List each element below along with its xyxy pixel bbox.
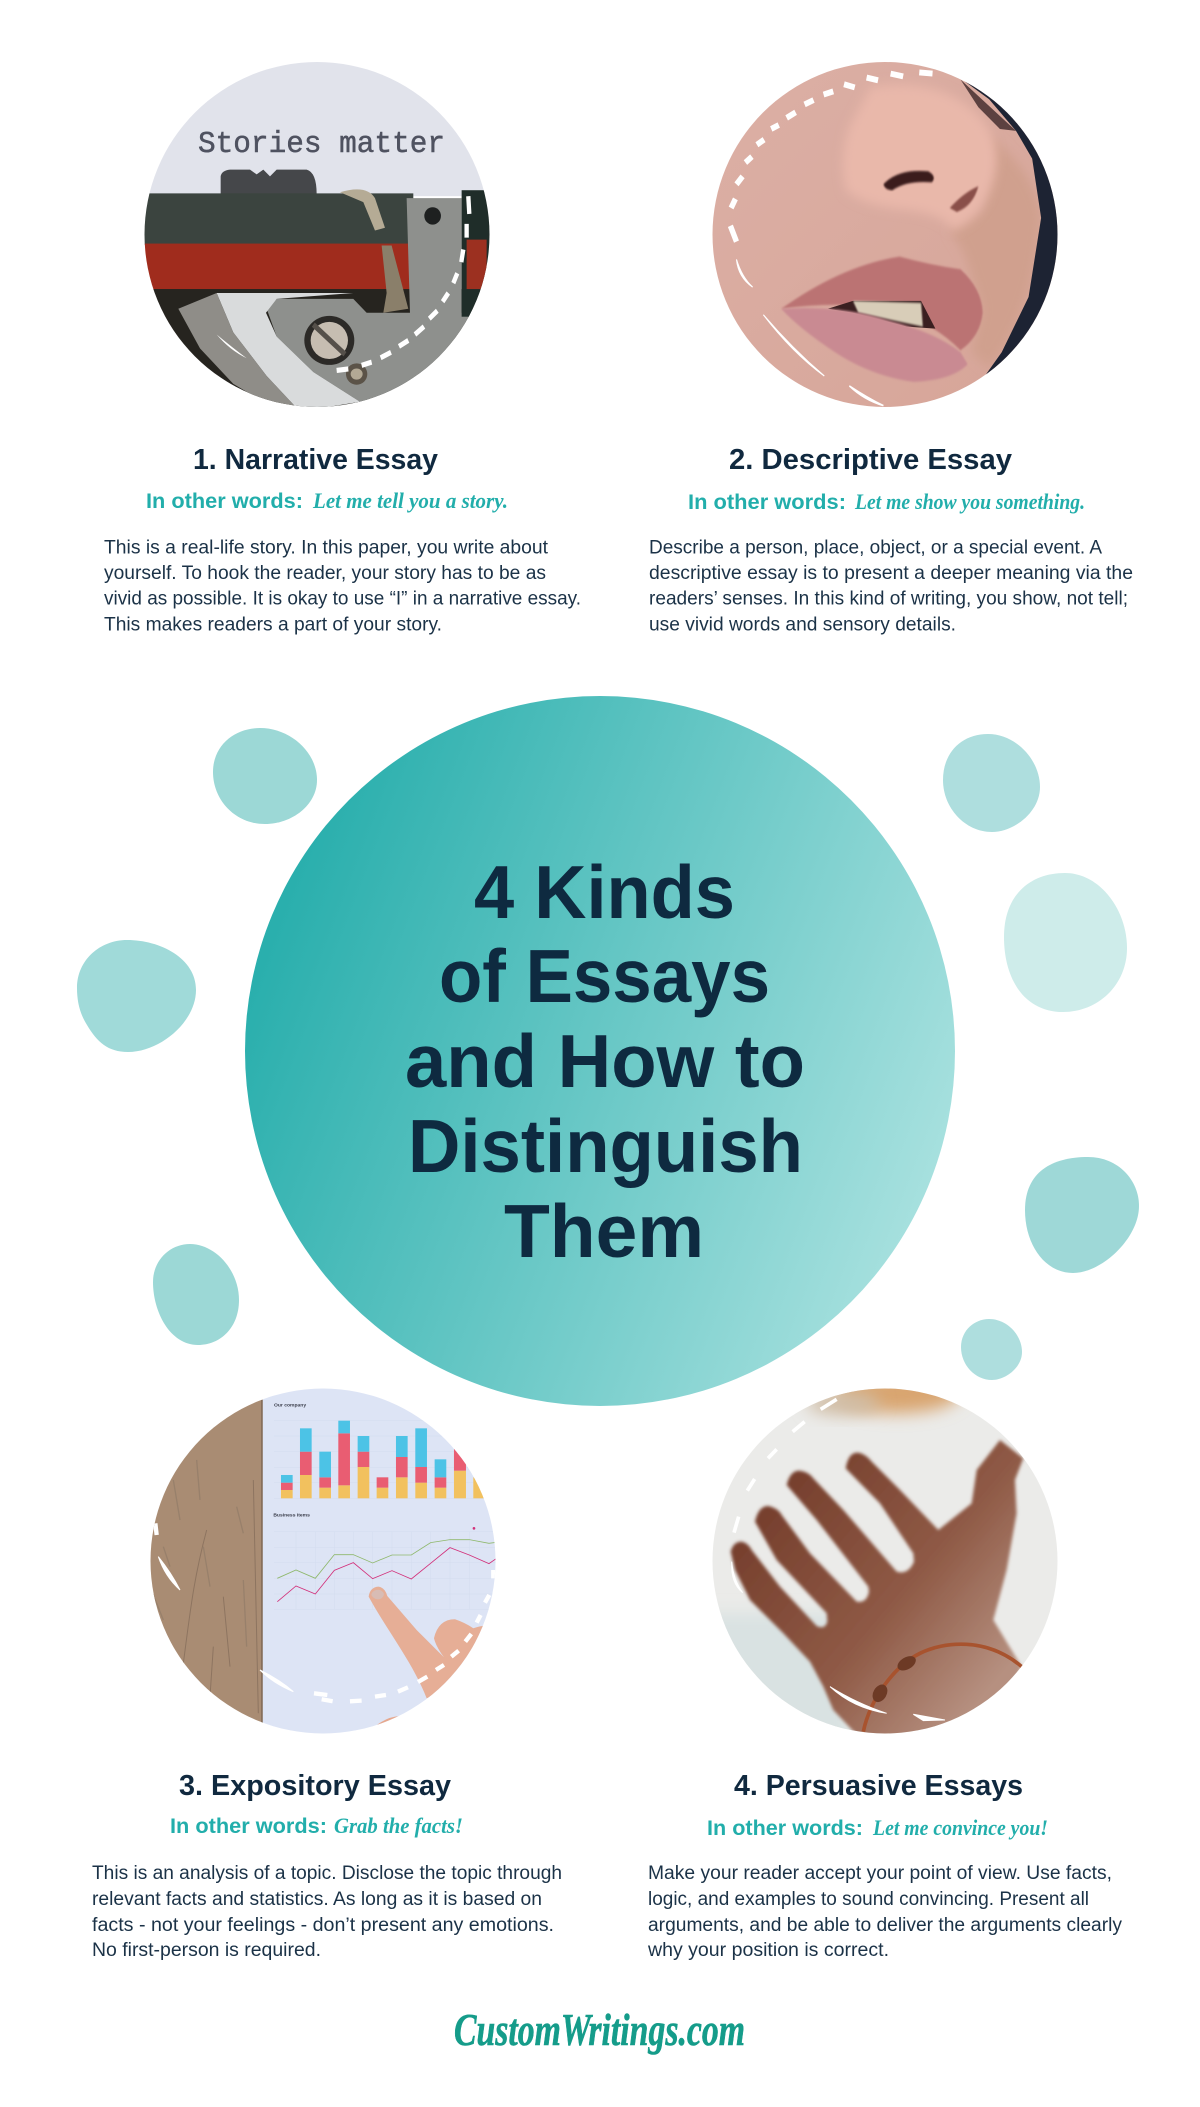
text block: persuasive description: Make your reader accept your point of view. Use facts, [648,1863,1112,1884]
hand [731,1440,1023,1738]
subtitle: in other words [688,489,1085,514]
subtitle: in other words: In other words: [688,491,846,514]
heading: 2. Descriptive Essay: 2. Descriptive Essay [729,444,1012,476]
text block: expository description: facts - not your feelings - don’t present any emotions. [92,1915,554,1936]
chart labels: Our company [274,1403,306,1409]
subtitle: in other words [170,1813,463,1838]
title: Them [504,1189,704,1273]
title: 4 Kinds [474,850,735,934]
text block: narrative description: yourself. To hook the reader, your story has to be as [104,563,546,584]
chart labels: Business Items [273,1513,310,1519]
panel: descriptive essay [649,40,1133,635]
title: Distinguish [408,1104,803,1188]
text block: descriptive description: Describe a person, place, object, or a special event. A [649,538,1102,558]
hand pointing [368,1586,483,1698]
subtitle: in other words: Let me tell you a story. [312,488,508,513]
text block: narrative description: This makes readers a part of your story. [104,614,442,635]
line chart [277,1540,497,1602]
subtitle: in other words: In other words: [707,1817,863,1840]
subtitle: in other words [707,1815,1048,1840]
subtitle: in other words: Grab the facts! [334,1813,463,1838]
text block: narrative description: This is a real-life story. In this paper, you write about [104,538,549,558]
photo: typewriter: Stories matter [198,127,445,162]
logo: CustomWritings.com: CustomWritings.com [454,2004,745,2055]
text block: expository description: relevant facts and statistics. As long as it is based on [92,1889,542,1910]
subtitle: in other words: Let me show you something. [854,489,1085,514]
text block: persuasive description: arguments, and be able to deliver the arguments clearly [648,1915,1123,1936]
chart labels [273,1403,310,1519]
photo: open hand [712,1388,1058,1734]
decorative blob cluster [77,728,1139,1380]
central circle with title [245,696,955,1406]
text block: descriptive description: readers’ senses. In this kind of writing, you show, not tell; [649,589,1128,610]
text block: narrative description: vivid as possible. It is okay to use “I” in a narrative essay. [104,589,581,610]
subtitle: in other words: Let me convince you! [872,1815,1048,1840]
subtitle: in other words: In other words: [146,490,303,513]
panel: expository essay [92,1380,562,1961]
text block: expository description [92,1863,562,1961]
panel: persuasive essay [647,1373,1123,1961]
panel: narrative essay [104,40,581,635]
stacked bars [281,1421,485,1498]
title [405,850,805,1273]
title: of Essays [439,934,770,1018]
heading: 3. Expository Essay: 3. Expository Essay [179,1770,451,1802]
text block: persuasive description: logic, and examples to sound convincing. Present all [648,1889,1089,1910]
photo: nose and lips [712,62,1058,407]
photo: typewriter [144,62,490,407]
title: and How to [405,1019,805,1103]
text block: expository description: This is an analysis of a topic. Disclose the topic through [92,1863,562,1884]
subtitle: in other words [146,488,508,513]
text block: descriptive description: descriptive essay is to present a deeper meaning via the [649,563,1133,584]
subtitle: in other words: In other words: [170,1815,327,1838]
heading: 4. Persuasive Essays: 4. Persuasive Essays [734,1770,1023,1802]
heading: 1. Narrative Essay: 1. Narrative Essay [193,444,438,476]
text block: persuasive description [647,1863,1123,1961]
photo: charts on paper [150,1388,496,1734]
text block: descriptive description [649,538,1133,635]
text block: narrative description [104,538,581,635]
text block: expository description: No first-person is required. [92,1940,321,1961]
text block: persuasive description: why your position is correct. [647,1940,889,1961]
text block: descriptive description: use vivid words and sensory details. [649,614,956,635]
